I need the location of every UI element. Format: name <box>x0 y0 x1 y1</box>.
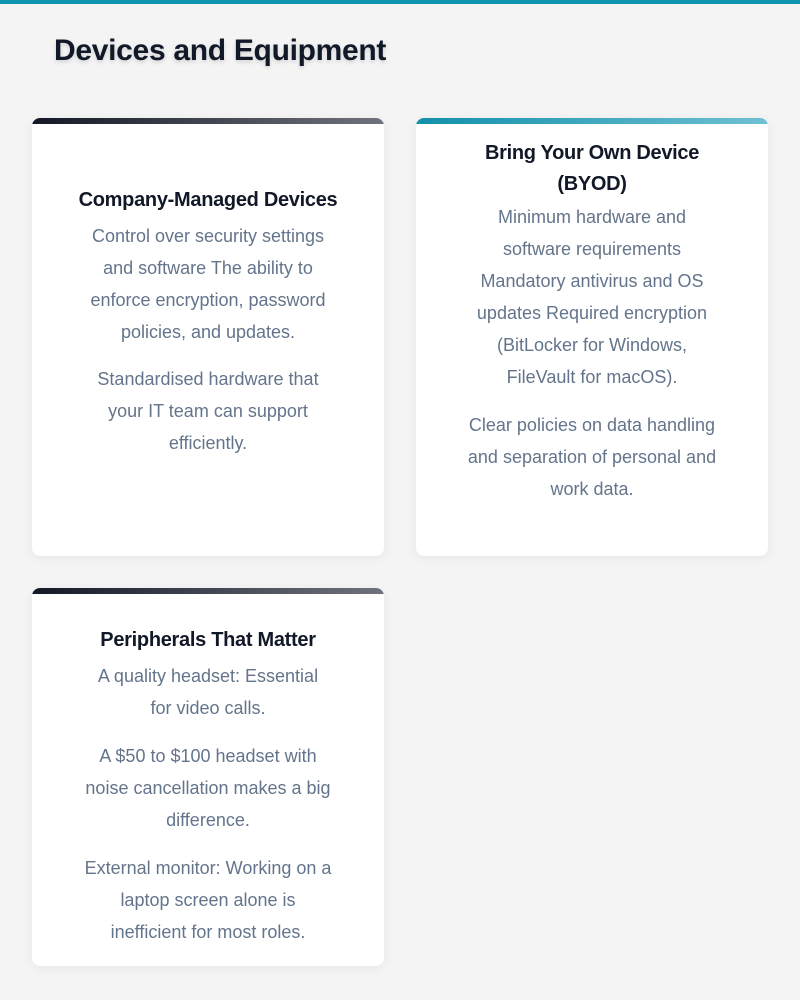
text: monitor: laptop screen alone is <box>120 890 296 910</box>
text: standardised: efficiently. <box>169 433 247 453</box>
heading: BYOD: Bring Your Own Device <box>485 142 699 164</box>
text: price: noise cancellation makes a big <box>85 778 331 798</box>
heading: BYOD: (BYOD) <box>557 173 627 195</box>
text: requirements: Minimum hardware and <box>498 207 686 227</box>
text: monitor <box>85 858 332 942</box>
text: control: and software The ability to <box>103 258 313 278</box>
text: control: Control over security settings <box>92 226 324 246</box>
heading: peripherals: Peripherals That Matter <box>100 629 316 651</box>
text: standardised: your IT team can support <box>108 401 308 421</box>
text: requirements: updates Required encryption <box>477 303 707 323</box>
text: requirements: FileVault for macOS). <box>507 367 677 387</box>
text: control <box>90 226 326 342</box>
text: headset: A quality headset: Essential <box>98 666 318 686</box>
text: requirements: Mandatory antivirus and OS <box>480 271 704 291</box>
text: standardised <box>97 369 319 453</box>
text: price <box>85 746 331 830</box>
panel: peripherals <box>32 588 384 966</box>
text: headset <box>98 666 318 718</box>
heading: BYOD <box>485 142 699 195</box>
text: policies: and separation of personal and <box>468 447 716 467</box>
text: control: policies, and updates. <box>121 322 295 342</box>
text: price: difference. <box>166 810 250 830</box>
text: requirements: (BitLocker for Windows, <box>497 335 687 355</box>
heading: company-managed: Company-Managed Devices <box>79 189 337 211</box>
text: policies <box>468 415 716 499</box>
text: monitor: External monitor: Working on a <box>85 858 331 878</box>
panel: BYOD <box>416 118 768 556</box>
text: policies: work data. <box>550 479 634 499</box>
text: control: enforce encryption, password <box>90 290 326 310</box>
panel: company-managed devices <box>32 118 384 556</box>
text: price: A $50 to $100 headset with <box>99 746 317 766</box>
text: standardised: Standardised hardware that <box>97 369 319 389</box>
title: Devices and Equipment <box>54 34 386 67</box>
text: requirements: software requirements <box>503 239 681 259</box>
text: policies: Clear policies on data handling <box>469 415 715 435</box>
text: requirements <box>477 207 707 387</box>
text: headset: for video calls. <box>150 698 266 718</box>
text: monitor: inefficient for most roles. <box>111 922 305 942</box>
